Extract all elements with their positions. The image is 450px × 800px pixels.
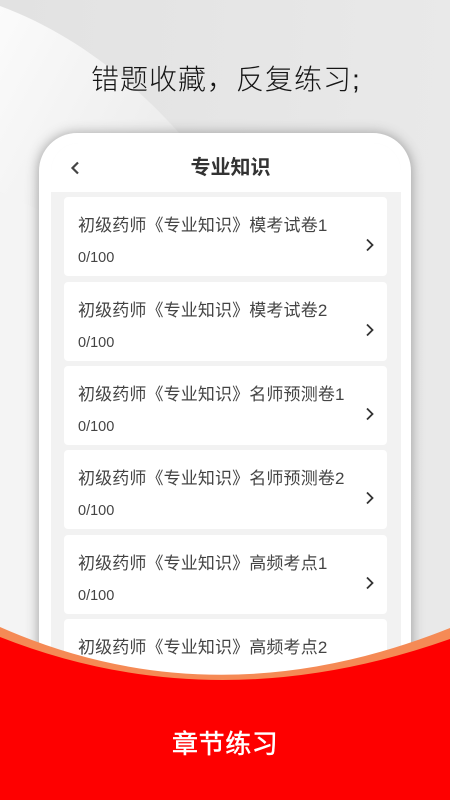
list card 3: 初级药师《专业知识》名师预测卷1 [78, 385, 345, 404]
title: 错题收藏，反复练习; [91, 64, 361, 95]
list card 4: 初级药师《专业知识》名师预测卷2 [78, 469, 345, 488]
list card 1: 0/100 [78, 250, 114, 266]
banner label: 章节练习 [172, 729, 278, 759]
icon: back arrow [71, 162, 79, 174]
list card 2: 0/100 [78, 335, 114, 351]
list card 1 [64, 197, 387, 276]
list card 6: 初级药师《专业知识》高频考点2 [78, 638, 327, 657]
bottom red banner with curved orange edge [0, 627, 450, 800]
app header [51, 143, 401, 192]
list card 4: 0/100 [78, 503, 114, 519]
list card 6 [64, 619, 387, 698]
list card 1: 初级药师《专业知识》模考试卷1 [78, 216, 327, 235]
list card 2 [64, 282, 387, 361]
list card 3 [64, 366, 387, 445]
list card 5 [64, 535, 387, 614]
list card 4 [64, 450, 387, 529]
list card 5: 初级药师《专业知识》高频考点1 [78, 554, 327, 573]
header title: 专业知识 [190, 157, 270, 179]
list card 2: 初级药师《专业知识》模考试卷2 [78, 301, 327, 320]
list card 3: 0/100 [78, 419, 114, 435]
phone screen [51, 143, 401, 733]
list card 5: 0/100 [78, 588, 114, 604]
list card 6: 0/100 [78, 672, 114, 688]
phone frame [39, 133, 411, 733]
